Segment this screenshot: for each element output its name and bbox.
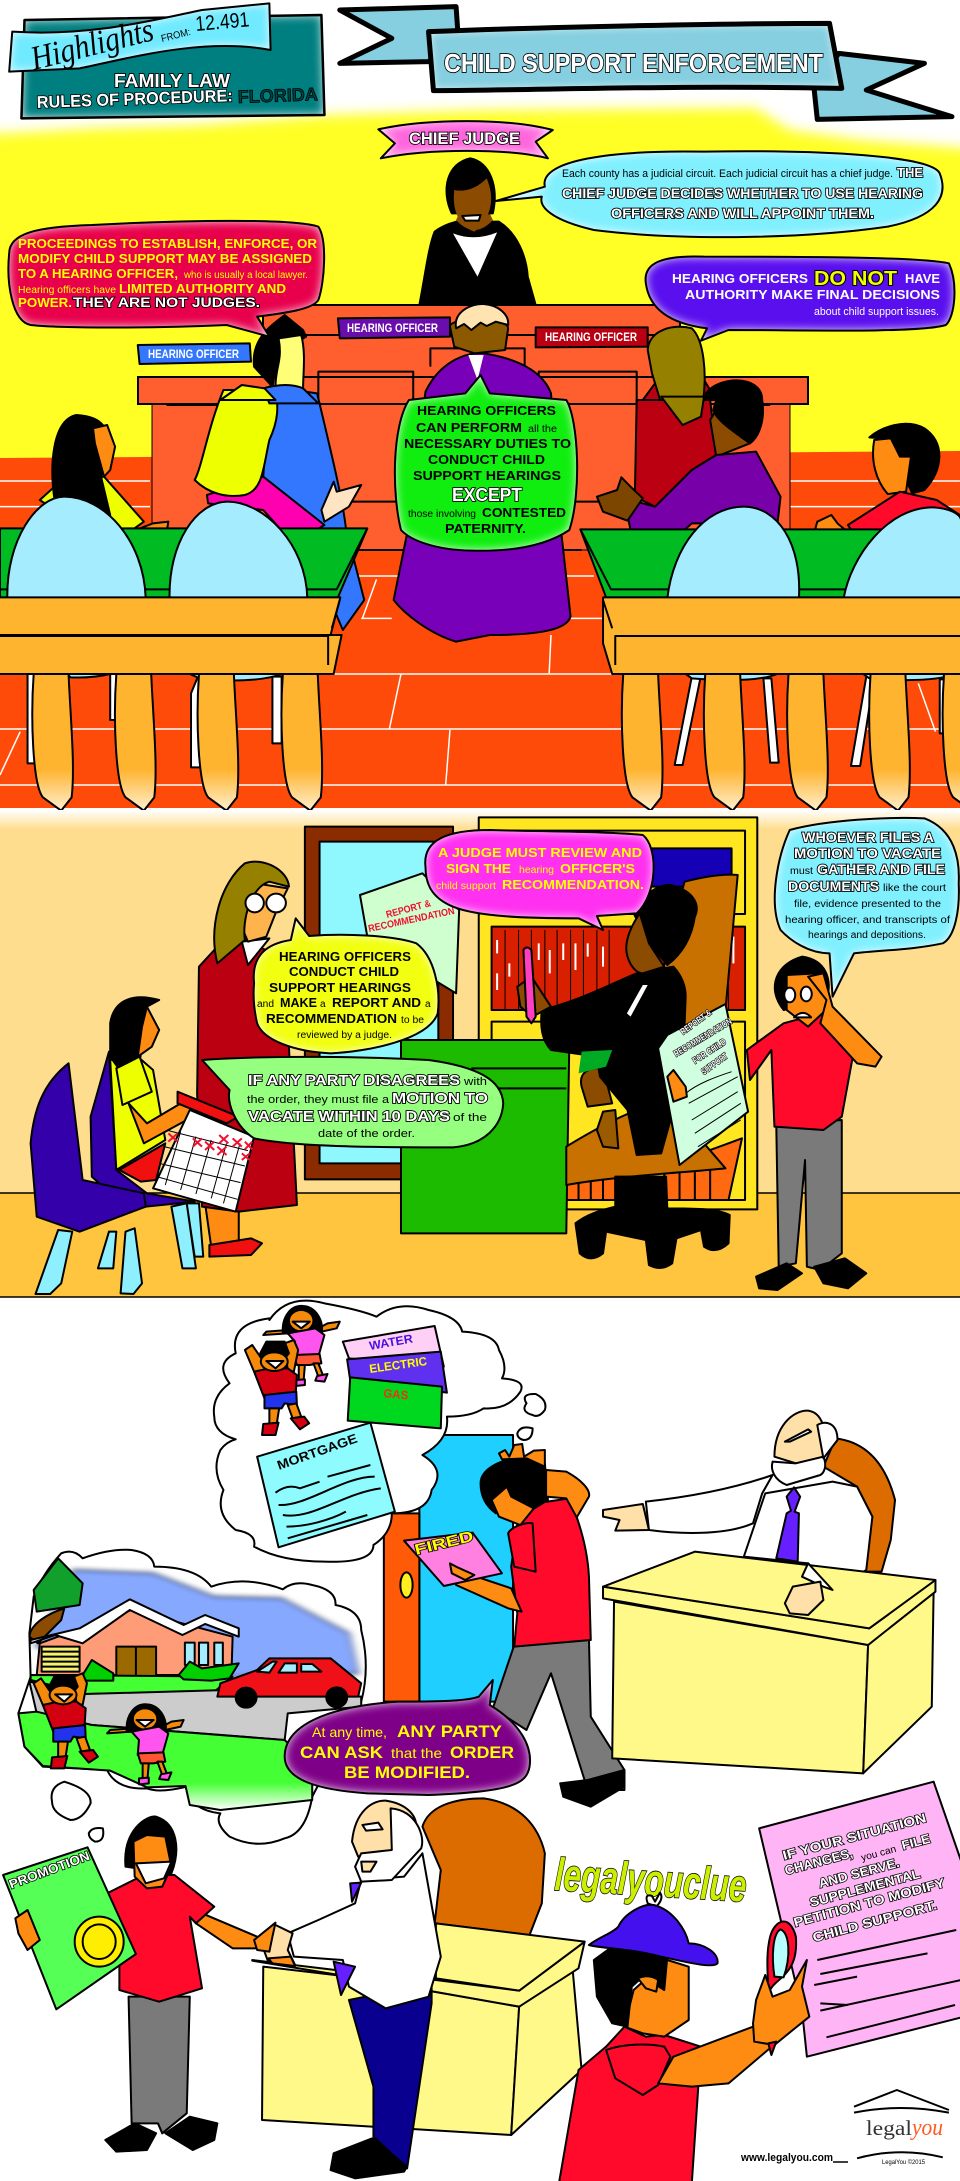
speech bubble: judge must review [425, 830, 654, 930]
speech bubble: hearing officers conduct: a [320, 999, 326, 1010]
tree [29, 1608, 64, 1643]
speech bubble: judge must review: RECOMMENDATION. [502, 877, 644, 892]
speech bubble: whoever files: WHOEVER FILES A [802, 829, 934, 845]
document: situation changes [759, 1782, 960, 2057]
document: situation changes: you can [860, 1844, 898, 1864]
speech bubble: duties except paternity [395, 375, 577, 551]
chair [422, 1798, 545, 1935]
banner: chief judge: CHIEF JUDGE [409, 129, 520, 148]
worried man with bubble [747, 957, 882, 1290]
speech bubble: motion to vacate: with [463, 1076, 487, 1088]
speech bubble: duties except paternity: SUPPORT HEARINGS [413, 468, 561, 483]
speech bubble: whoever files: must [790, 866, 813, 877]
speech bubble: proceedings: MODIFY CHILD SUPPORT MAY BE ASSIGNED [18, 251, 312, 266]
speech bubble: hearing officers conduct: HEARING OFFICERS [279, 949, 411, 964]
speech bubble: proceedings [8, 221, 324, 337]
speech bubble: any party can ask: ORDER [450, 1743, 514, 1762]
document: report held by judge: FOR CHILD [691, 1036, 728, 1066]
document: fired: FIRED [413, 1528, 475, 1559]
speech bubble: motion to vacate [202, 1057, 503, 1147]
label: hearing officer purple [338, 317, 450, 338]
speech bubble: proceedings: LIMITED AUTHORITY AND [119, 281, 286, 296]
speech bubble: hearing officers conduct: and [257, 999, 274, 1010]
document: situation changes: FILE [900, 1831, 932, 1853]
speech bubble: hearing officers conduct: SUPPORT HEARINGS [269, 980, 411, 995]
speech bubble: whoever files: GATHER AND FILE [817, 861, 945, 877]
speech bubble: any party can ask: BE MODIFIED. [344, 1763, 470, 1782]
speech bubble: motion to vacate: date of the order. [318, 1128, 415, 1140]
document: situation changes: PETITION TO MODIFY [792, 1875, 947, 1930]
header: highlights box: FAMILY LAW [114, 71, 230, 91]
speech bubble: proceedings: POWER. [18, 295, 72, 310]
speech bubble: chief judge: Each county has a judicial circuit. Each judicial circuit has a chief judge. [562, 168, 893, 180]
speech bubble: duties except paternity: CONTESTED [482, 505, 566, 520]
bill: electric [347, 1352, 447, 1393]
header: highlights box: FLORIDA [237, 84, 318, 107]
boss behind desk pointing [603, 1411, 895, 1590]
speech bubble: chief judge: THE [897, 165, 923, 180]
desk and legs, left side [0, 597, 342, 811]
kids outside house [34, 1673, 184, 1784]
office floor [0, 1193, 960, 1297]
right audience, woman with olive hair and man in purple [597, 327, 781, 555]
speech bubble: proceedings: PROCEEDINGS TO ESTABLISH, ENFORCE, OR [18, 236, 318, 251]
speech bubble: hearing officers conduct: MAKE [280, 995, 317, 1010]
speech bubble: do not have authority: HAVE [905, 271, 940, 286]
header: title ribbon [340, 7, 952, 119]
chair backs [7, 497, 960, 598]
man reading fired notice [404, 1444, 624, 1807]
desk [252, 1923, 585, 2135]
logo: legalyou: you [910, 2115, 943, 2141]
speech bubble: whoever files: MOTION TO VACATE [794, 845, 941, 861]
speech bubble: judge must review: child support [436, 881, 496, 892]
label: hearing officer blue: HEARING OFFICER [148, 347, 239, 361]
header: highlights box: FROM: [160, 27, 192, 45]
speech bubble: judge must review: OFFICER'S [560, 861, 635, 876]
shoe [560, 1770, 624, 1807]
speech bubble: duties except paternity: CAN PERFORM [416, 420, 522, 435]
courtroom floor [0, 451, 960, 808]
bill: electric: ELECTRIC [368, 1354, 428, 1376]
document: mortgage [257, 1423, 395, 1547]
speech bubble: duties except paternity: all the [528, 424, 557, 435]
boy detective with magnifier [559, 1893, 809, 2181]
speech bubble: whoever files: hearings and depositions. [808, 930, 926, 941]
speech bubble: hearing officers conduct: a [425, 999, 431, 1010]
speech bubble: chief judge: CHIEF JUDGE DECIDES WHETHER TO USE HEARING [562, 185, 923, 201]
yellow desk [603, 1552, 935, 1773]
document: report held by judge: SUPPORT [699, 1051, 730, 1077]
document: report held by judge: RECOMMENDATION [672, 1016, 734, 1059]
logo: legalyou: LegalYou ©2015 [882, 2159, 926, 2166]
speech bubble: whoever files: hearing officer, and transcripts of [785, 915, 950, 926]
document: situation changes: CHANGES, [783, 1845, 854, 1878]
banner: chief judge [378, 121, 553, 158]
speech bubble: hearing officers conduct: to be [401, 1015, 424, 1026]
thought cloud: house and car [18, 1550, 366, 1844]
label: hearing officer red: HEARING OFFICER [545, 330, 637, 344]
speech bubble: motion to vacate: of the [453, 1112, 487, 1124]
bill: water [343, 1326, 444, 1367]
label: hearing officer red [536, 327, 648, 347]
speech bubble: motion to vacate: the order, they must file a [247, 1094, 390, 1106]
header: highlights box: 12.491 [194, 8, 250, 36]
thought puffs [52, 1782, 103, 1842]
panel: courtroom scene [0, 108, 960, 811]
left audience, man in blue with yellow-haired woman [195, 315, 364, 630]
chair legs and seats [28, 674, 955, 767]
header: highlights box: RULES OF PROCEDURE: [36, 86, 233, 112]
seated woman with calendar [31, 997, 254, 1294]
speech bubble: hearing officers conduct [254, 918, 438, 1053]
report paper behind bubble [360, 873, 459, 993]
speech bubble: motion to vacate: MOTION TO [392, 1090, 488, 1107]
green desks [0, 528, 960, 597]
speech bubble: any party can ask: At any time, [312, 1724, 387, 1740]
speech bubble: hearing officers conduct: REPORT AND [332, 995, 421, 1010]
chief judge figure [419, 158, 536, 305]
speech bubble: proceedings: who is usually a local lawyer. [183, 270, 308, 281]
floor tile lines [0, 481, 960, 785]
speech bubble: chief judge: OFFICERS AND WILL APPOINT THEM. [611, 205, 874, 221]
speech bubble: proceedings: Hearing officers have [18, 285, 116, 296]
document: fired [404, 1528, 502, 1586]
speech bubble: chief judge [496, 151, 943, 237]
kids thought [245, 1306, 340, 1435]
speech bubble: any party can ask: that the [391, 1745, 442, 1761]
speech bubble: proceedings: THEY ARE NOT JUDGES. [73, 294, 260, 310]
courtroom wall [0, 108, 960, 470]
panel: promotion and handshake scene [3, 1782, 960, 2181]
speech bubble: duties except paternity: PATERNITY. [445, 521, 526, 536]
thought cloud: bills and mortgage [214, 1301, 545, 1562]
document: situation changes: CHILD SUPPORT. [811, 1897, 938, 1945]
hearing officer standing [197, 862, 297, 1257]
document: situation changes: IF YOUR SITUATION [781, 1810, 928, 1863]
green desk [401, 1040, 569, 1233]
header: highlights box [9, 3, 324, 118]
speech bubble: proceedings: TO A HEARING OFFICER, [18, 266, 178, 281]
report paper behind bubble: RECOMMENDATION [367, 906, 456, 935]
speech bubble: duties except paternity: CONDUCT CHILD [428, 452, 545, 467]
speech bubble: whoever files [775, 818, 959, 997]
house [31, 1599, 239, 1676]
speech bubble: duties except paternity: NECESSARY DUTIES TO [404, 436, 571, 451]
bookshelf [479, 817, 757, 1209]
header: highlights box: Highlights [26, 12, 157, 78]
man with promotion [105, 1817, 257, 2152]
speech bubble: duties except paternity: those involving [408, 509, 476, 520]
speech bubble: whoever files: file, evidence presented to the [794, 899, 941, 910]
speech bubble: hearing officers conduct: RECOMMENDATION [266, 1011, 397, 1026]
logo: legalyou [854, 2090, 949, 2166]
document: situation changes: SUPPLEMENTAL [808, 1866, 922, 1910]
left audience, far-left woman [40, 415, 168, 557]
speech bubble: motion to vacate: VACATE WITHIN 10 DAYS [248, 1108, 450, 1125]
header: title ribbon: CHILD SUPPORT ENFORCEMENT [444, 48, 823, 78]
speech bubble: do not have authority: AUTHORITY MAKE FINAL DECISIONS [685, 287, 940, 302]
speech bubble: do not have authority: HEARING OFFICERS [672, 271, 808, 286]
document: report held by judge [658, 1004, 748, 1165]
speech bubble: hearing officers conduct: reviewed by a judge. [297, 1030, 392, 1041]
office wall [0, 810, 960, 1194]
right audience, far-right man [815, 424, 960, 563]
judge in chair [517, 875, 738, 1268]
desk and legs, right side [603, 597, 960, 811]
speech bubble: judge must review: hearing [519, 865, 554, 876]
boss shaking hands [254, 1801, 441, 2178]
speech bubble: hearing officers conduct: CONDUCT CHILD [289, 964, 399, 979]
panel: office scene [0, 810, 960, 1297]
label: hearing officer blue [138, 343, 251, 364]
document: report held by judge: REPORT & [678, 1007, 714, 1037]
panel: fired scene [18, 1301, 935, 1844]
board: promotion: PROMOTION [7, 1848, 92, 1892]
speech bubble: duties except paternity: EXCEPT [452, 485, 522, 505]
speech bubble: duties except paternity: HEARING OFFICERS [417, 403, 556, 418]
speech bubble: judge must review: SIGN THE [446, 861, 511, 876]
speech bubble: whoever files: DOCUMENTS [788, 878, 879, 894]
speech bubble: do not have authority [646, 256, 954, 341]
website url: www.legalyou.com [740, 2152, 833, 2164]
speech bubble: any party can ask [285, 1680, 530, 1795]
bill: gas: GAS [383, 1386, 409, 1403]
board: promotion [3, 1847, 136, 2009]
speech bubble: judge must review: A JUDGE MUST REVIEW AND [438, 845, 642, 860]
document: mortgage: MORTGAGE [275, 1431, 360, 1473]
speech bubble: motion to vacate: IF ANY PARTY DISAGREES [248, 1072, 460, 1089]
bill: gas [348, 1377, 442, 1428]
document: situation changes: AND SERVE. [817, 1855, 901, 1891]
window [305, 827, 453, 1179]
speech bubble: any party can ask: CAN ASK [300, 1743, 384, 1762]
door [384, 1435, 513, 1702]
speech bubble: do not have authority: DO NOT [814, 268, 897, 290]
label: hearing officer purple: HEARING OFFICER [347, 321, 438, 335]
report paper behind bubble: REPORT & [385, 898, 432, 921]
hearing officer at center, purple robe [394, 304, 571, 642]
speech bubble: any party can ask: ANY PARTY [397, 1722, 503, 1741]
speech bubble: do not have authority: about child support issues. [814, 306, 939, 318]
sky [37, 1570, 358, 1677]
bill: water: WATER [368, 1331, 414, 1353]
judge's bench [138, 305, 808, 550]
logo: legalyou: legal [866, 2116, 912, 2140]
car [217, 1658, 361, 1708]
speech bubble: whoever files: like the court [883, 883, 946, 894]
lawn and road [18, 1660, 361, 1810]
logo text: legalyouclue: legalyouclue [553, 1848, 748, 1912]
